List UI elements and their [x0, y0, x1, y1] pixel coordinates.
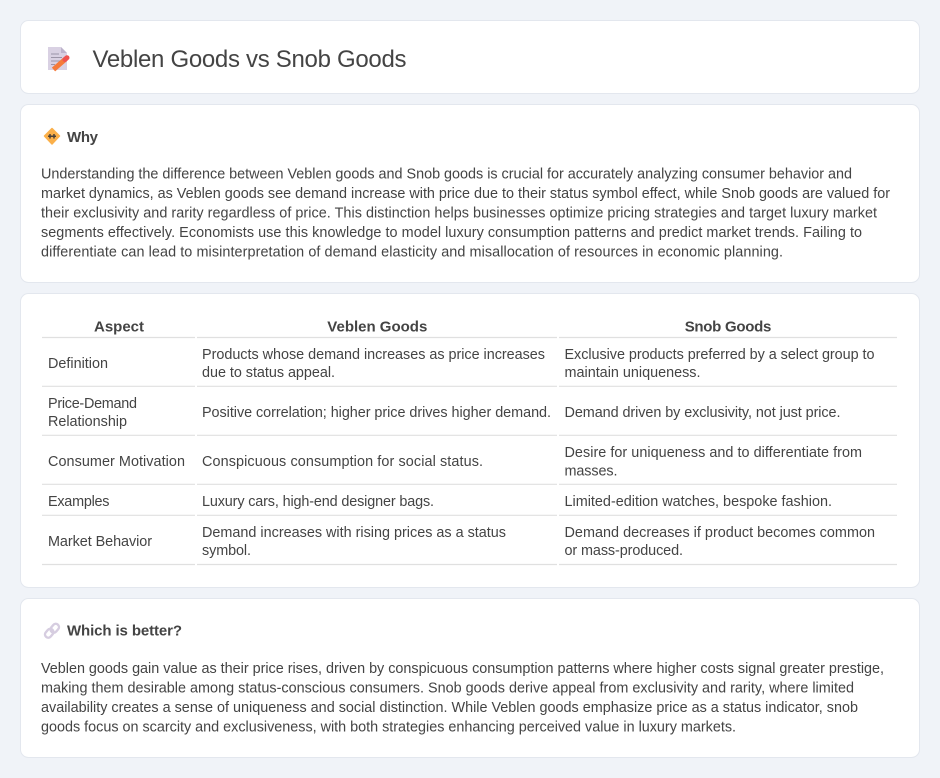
text block: which is better: Veblen goods gain value as their price rises, driven by conspicuous consumption patterns where higher costs signal greater prestige, [41, 661, 884, 677]
table row: market behavior: Demand increases with rising prices as a status [202, 525, 506, 541]
table row: examples [48, 494, 832, 510]
text block: which is better: availability creates a sense of uniqueness and social distinction. While Veblen goods emphasize price as a status indicator, snob [41, 700, 858, 716]
text block: why: their exclusivity and rarity regardless of price. This distinction helps businesses optimize pricing strategies and target luxury market [41, 206, 877, 222]
panel: which is better [20, 598, 920, 758]
panel: header [20, 20, 920, 94]
text block: which is better: making them desirable among status-conscious consumers. Snob goods derive appeal from exclusivity and rarity, where limited [41, 680, 854, 696]
table row: examples: Luxury cars, high-end designer bags. [202, 494, 434, 510]
table row: market behavior: Demand decreases if product becomes common [564, 525, 875, 541]
heading: which is better: Which is better? [67, 622, 182, 640]
table row: consumer motivation: Desire for uniqueness and to differentiate from [564, 445, 862, 461]
icon: document with pencil [48, 47, 67, 70]
icon: chain link [44, 623, 60, 639]
table header row: Snob Goods [685, 318, 771, 336]
table row: consumer motivation: Consumer Motivation [48, 454, 185, 470]
heading: why: Why [67, 129, 99, 146]
text block: why: differentiate can lead to misinterpretation of demand elasticity and misallocation of resources in economic planning. [41, 244, 783, 260]
icon: warning diamond [44, 128, 60, 144]
table row: consumer motivation [48, 445, 862, 480]
table row: consumer motivation: masses. [564, 464, 618, 480]
table row: market behavior [48, 525, 875, 559]
table row: consumer motivation: Conspicuous consumption for social status. [202, 454, 483, 470]
table row: price-demand relationship: Price-Demand [48, 396, 137, 412]
table row: price-demand relationship [48, 396, 840, 430]
table row: price-demand relationship: Positive correlation; higher price drives higher demand. [202, 405, 551, 421]
table row: definition [48, 347, 874, 381]
text block: why: segments effectively. Economists use this knowledge to model luxury consumption patterns and predict market trends. Failing to [41, 225, 862, 241]
table row: price-demand relationship: Relationship [48, 414, 127, 430]
panel: why [20, 104, 920, 282]
text block: why: Understanding the difference between Veblen goods and Snob goods is crucial for accurately analyzing consumer behavior and [41, 166, 852, 182]
text block: why [41, 166, 890, 260]
table row: definition: Products whose demand increases as price increases [202, 347, 545, 363]
table row: definition: due to status appeal. [202, 365, 335, 381]
table row: examples: Limited-edition watches, bespoke fashion. [564, 494, 832, 510]
title: Veblen Goods vs Snob Goods [92, 46, 406, 73]
text block: why: market dynamics, as Veblen goods see demand increase with price due to their status symbol effect, while Snob goods are valued for [41, 186, 890, 202]
panel: comparison table [20, 294, 920, 588]
table header row [94, 318, 771, 336]
table header row: Veblen Goods [327, 318, 427, 336]
table row: market behavior: Market Behavior [48, 534, 152, 550]
table header row: Aspect [94, 318, 144, 336]
table row: market behavior: or mass-produced. [564, 543, 683, 559]
table row: price-demand relationship: Demand driven by exclusivity, not just price. [564, 405, 840, 421]
text block: which is better [41, 661, 884, 736]
table row: examples: Examples [48, 494, 110, 510]
table row: market behavior: symbol. [202, 543, 251, 559]
table row: definition: maintain uniqueness. [564, 365, 700, 381]
text block: which is better: goods focus on scarcity and exclusiveness, with both strategies enhancing perceived value in luxury markets. [41, 720, 736, 736]
table row: definition: Exclusive products preferred by a select group to [564, 347, 874, 363]
table row: definition: Definition [48, 356, 108, 372]
